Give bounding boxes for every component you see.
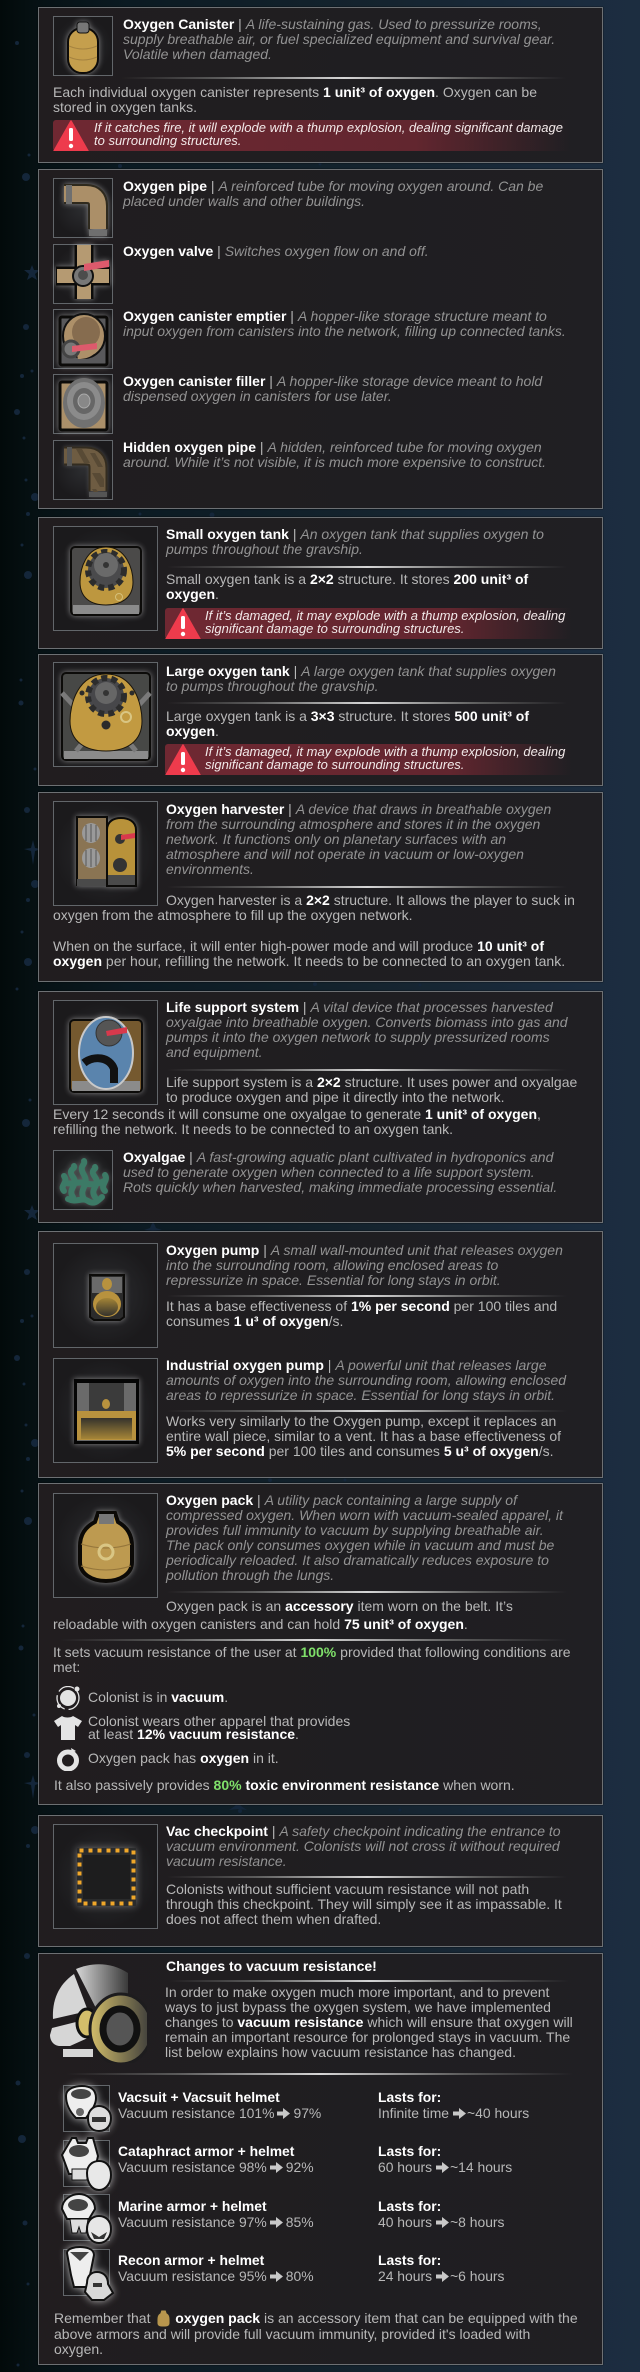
panel: oxygen pumps: [38, 1231, 603, 1478]
icon: oxyalgae: [53, 1150, 113, 1210]
duration: recon: [378, 2253, 578, 2284]
description: vac checkpoint: vacuum resistance.: [166, 1853, 287, 1869]
panel: vac checkpoint: [38, 1815, 603, 1947]
body text: industrial pump stats: Works very similarly to the Oxygen pump, except it replaces an: [166, 1413, 556, 1429]
description: oxyalgae: used to generate oxygen when connected to a life support system.: [123, 1164, 535, 1180]
icon: recon armor and helmet: [63, 2249, 110, 2296]
icon: large oxygen tank: [53, 662, 158, 767]
icon: vac checkpoint: [53, 1824, 158, 1929]
warning: large tank explosion: [165, 744, 572, 775]
description: life support system: pumps it into the oxygen network to supply pressurized rooms: [166, 1029, 550, 1045]
description: hidden oxygen pipe: around. While it’s not visible, it is much more expensive to construct.: [123, 454, 546, 470]
description: oxygen canister: [123, 16, 555, 62]
icon: oxygen harvester: [53, 801, 158, 906]
description: oxygen pump: repressurize in space. Essential for long stays in orbit.: [166, 1272, 501, 1288]
description: large oxygen tank: Large oxygen tank | A large oxygen tank that supplies oxygen: [166, 663, 556, 679]
armor stats: vacsuit: Vacuum resistance 101% 97%: [118, 2105, 321, 2121]
body text: vacuum resistance explanation: ways to just bypass the oxygen system, we have implemented: [165, 1999, 551, 2015]
footer note: oxygen pack reminder: [54, 2310, 584, 2357]
description: oxygen canister filler: dispensed oxygen in canisters for use later.: [123, 388, 392, 404]
body text: life support structure: to produce oxygen and pipe it directly into the network.: [166, 1089, 505, 1105]
duration: marine: [378, 2199, 578, 2230]
description: oxyalgae: [123, 1149, 557, 1195]
icon: oxygen valve: [53, 244, 113, 304]
warning: large tank explosion: significant damage to surrounding structures.: [205, 757, 464, 772]
icon: hidden oxygen pipe: [53, 440, 113, 500]
body text: small tank stats: oxygen.: [166, 586, 219, 602]
panel: oxygen harvester: [38, 792, 603, 982]
duration: marine: 40 hours ~8 hours: [378, 2214, 505, 2230]
description: oxygen canister filler: Oxygen canister filler | A hopper-like storage device meant to hold: [123, 373, 542, 389]
description: oxyalgae: Oxyalgae | A fast-growing aquatic plant cultivated in hydroponics and: [123, 1149, 553, 1165]
icon: vacsuit and helmet: [63, 2085, 110, 2132]
armor stats: recon: Recon armor + helmet: [118, 2252, 264, 2268]
footer note: oxygen pack reminder: oxygen.: [54, 2341, 103, 2357]
body text: vacuum resistance explanation: list below explains how vacuum resistance has changed.: [165, 2044, 516, 2060]
body text: harvester output: When on the surface, it will enter high-power mode and will produce 10 unit³ of: [53, 938, 544, 954]
body text: harvester output: [53, 938, 565, 969]
description: oxygen pack: Oxygen pack | A utility pack containing a large supply of: [166, 1492, 517, 1508]
description: oxygen canister emptier: input oxygen from canisters into the network, filling up connected tanks.: [123, 323, 566, 339]
description: large oxygen tank: to pumps throughout the gravship.: [166, 678, 378, 694]
icon: oxygen pump: [53, 1243, 158, 1348]
description: oxygen harvester: atmosphere and will not operate in vacuum or low-oxygen: [166, 846, 524, 862]
description: industrial oxygen pump: [166, 1357, 566, 1403]
heading: changes to vacuum resistance: Changes to vacuum resistance!: [166, 1958, 377, 1974]
body text: canister details: stored in oxygen tanks.: [53, 99, 197, 115]
description: oxygen harvester: from the surrounding atmosphere and stores it in the oxygen: [166, 816, 540, 832]
panel: oxygen pack: [38, 1483, 603, 1805]
body text: life support structure: Life support system is a 2×2 structure. It uses power and oxyalgae: [166, 1074, 577, 1090]
armor stats: cataphract: [118, 2143, 314, 2175]
body text: harvester structure: Oxygen harvester is a 2×2 structure. It allows the player to suck in: [166, 892, 575, 908]
body text: harvester output: oxygen per hour, refilling the network. It needs to be connected to an oxygen tank.: [53, 953, 565, 969]
icon: oxygen canister emptier: [53, 309, 113, 369]
body text: industrial pump stats: [166, 1413, 562, 1459]
description: oxygen valve: Oxygen valve | Switches oxygen flow on and off.: [123, 243, 429, 259]
warning: small tank explosion: [165, 608, 572, 639]
description: hidden oxygen pipe: [123, 439, 546, 470]
armor stats: vacsuit: [118, 2089, 321, 2121]
description: life support system: oxyalgae into breathable oxygen. Converts biomass into gas and: [166, 1014, 568, 1030]
body text: pack accessory: [53, 1598, 513, 1632]
duration: cataphract: [378, 2144, 578, 2175]
description: oxygen canister emptier: [123, 308, 566, 339]
body text: checkpoint behaviour: [166, 1881, 562, 1927]
armor stats: cataphract: Cataphract armor + helmet: [118, 2143, 294, 2159]
body text: vacuum resistance conditions: met:: [53, 1659, 80, 1675]
description: small oxygen tank: Small oxygen tank | An oxygen tank that supplies oxygen to: [166, 526, 544, 542]
description: oxygen pack: compressed oxygen. When worn with vacuum-sealed apparel, it: [166, 1507, 563, 1523]
duration: cataphract: 60 hours ~14 hours: [378, 2159, 512, 2175]
description: oxygen pack: [166, 1492, 564, 1583]
body text: harvester structure: [53, 892, 575, 923]
description: oxygen canister: supply breathable air, or fuel specialized equipment and survival gear.: [123, 31, 555, 47]
duration: vacsuit: [378, 2089, 529, 2121]
body text: small tank stats: [166, 571, 528, 602]
icon: oxygen pipe: [53, 178, 113, 238]
panel: small oxygen tank: [38, 517, 603, 649]
duration: recon: 24 hours ~6 hours: [378, 2268, 505, 2284]
description: oxygen canister: Volatile when damaged.: [123, 46, 272, 62]
icon: small oxygen tank: [53, 526, 158, 631]
condition: apparel: Colonist wears other apparel that provides: [88, 1713, 350, 1729]
description: oxygen harvester: Oxygen harvester | A device that draws in breathable oxygen: [166, 801, 551, 817]
body text: large tank stats: oxygen.: [166, 723, 219, 739]
description: life support system: and equipment.: [166, 1044, 263, 1060]
duration: vacsuit: Infinite time ~40 hours: [378, 2105, 529, 2121]
body text: vacuum resistance conditions: [53, 1644, 571, 1675]
armor stats: marine: Vacuum resistance 97% 85%: [118, 2214, 314, 2230]
description: industrial oxygen pump: amounts of oxygen into the surrounding room, allowing enclosed: [166, 1372, 566, 1388]
body text: checkpoint behaviour: Colonists without sufficient vacuum resistance will not path: [166, 1881, 529, 1897]
body text: checkpoint behaviour: through this checkpoint. They will simply see it as impassable. It: [166, 1896, 562, 1912]
description: oxygen harvester: environments.: [166, 861, 254, 877]
condition: apparel: [88, 1713, 350, 1742]
body text: oxygen pump stats: It has a base effectiveness of 1% per second per 100 tiles and: [166, 1298, 557, 1314]
description: vac checkpoint: [166, 1823, 561, 1869]
condition: vacuum: Colonist is in vacuum.: [88, 1689, 228, 1705]
body text: checkpoint behaviour: does not affect them when drafted.: [166, 1911, 381, 1927]
footer note: oxygen pack reminder: above armors and will provide full vacuum immunity, provided it's loaded with: [54, 2326, 530, 2342]
body text: pack accessory: Oxygen pack is an accessory item worn on the belt. It’s: [166, 1598, 513, 1614]
condition: oxygen in pack: Oxygen pack has oxygen in it.: [88, 1750, 279, 1766]
description: oxygen pipe: [122, 178, 543, 209]
armor stats: marine: Marine armor + helmet: [118, 2198, 267, 2214]
icon: helmet with oxygen: [50, 1964, 147, 2062]
warning: canister explosion: to surrounding structures.: [94, 133, 241, 148]
armor stats: marine: [118, 2199, 358, 2230]
body text: vacuum resistance explanation: [165, 1984, 573, 2060]
description: oxygen pump: Oxygen pump | A small wall-mounted unit that releases oxygen: [166, 1242, 563, 1258]
warning: small tank explosion: If it’s damaged, it may explode with a thump explosion, dealing: [205, 608, 565, 623]
body text: vacuum resistance explanation: remain an important resource for prolonged stays in vacuum. The: [165, 2029, 570, 2045]
description: oxygen pipe: Oxygen pipe | A reinforced tube for moving oxygen around. Can be: [123, 178, 543, 194]
icon: oxygen canister filler: [53, 374, 113, 434]
duration: marine: Lasts for:: [378, 2198, 441, 2214]
body text: canister details: [53, 84, 537, 115]
icon: oxygen ring: [57, 1748, 79, 1771]
icon: life support system: [53, 1000, 158, 1105]
description: oxygen pack: The pack only consumes oxygen while in vacuum and must be: [166, 1537, 554, 1553]
description: small oxygen tank: pumps throughout the gravship.: [166, 541, 363, 557]
description: life support system: [166, 999, 568, 1060]
description: oxygen canister filler: [123, 373, 542, 404]
body text: industrial pump stats: 5% per second per 100 tiles and consumes 5 u³ of oxygen/s.: [166, 1443, 554, 1459]
description: oxygen pack: periodically reloaded. It also dramatically reduces exposure to: [166, 1552, 549, 1568]
warning: canister explosion: If it catches fire, it will explode with a thump explosion, dealing significant damage: [94, 120, 563, 135]
body text: large tank stats: [166, 708, 530, 739]
warning: large tank explosion: If it’s damaged, it may explode with a thump explosion, dealing: [205, 744, 565, 759]
body text: industrial pump stats: entire wall piece, similar to a vent. It has a base effectiveness of: [166, 1428, 561, 1444]
body text: life support output: refilling the network. It needs to be connected to an oxygen tank.: [53, 1121, 453, 1137]
condition: apparel: at least 12% vacuum resistance.: [88, 1726, 299, 1742]
armor stats: recon: [118, 2253, 358, 2284]
description: oxygen pump: into the surrounding room, allowing enclosed areas to: [166, 1257, 498, 1273]
warning: canister explosion: [53, 120, 571, 151]
body text: harvester structure: oxygen from the atmosphere to fill up the oxygen network.: [53, 907, 413, 923]
icon: cataphract armor and helmet: [63, 2140, 110, 2187]
description: large oxygen tank: [166, 663, 556, 694]
panel: oxygen canister: [38, 7, 603, 163]
body text: life support output: Every 12 seconds it will consume one oxyalgae to generate 1 unit³ of oxygen,: [53, 1106, 541, 1122]
body text: oxygen pump stats: [166, 1298, 557, 1329]
description: oxygen pack: provides full immunity to vacuum by supplying breathable air.: [166, 1522, 544, 1538]
body text: life support output: [53, 1106, 541, 1137]
description: vac checkpoint: vacuum environment. Colonists will not cross it without required: [166, 1838, 560, 1854]
armor stats: recon: Vacuum resistance 95% 80%: [118, 2268, 314, 2284]
icon: marine armor and helmet: [63, 2194, 110, 2241]
armor stats: vacsuit: Vacsuit + Vacsuit helmet: [118, 2089, 280, 2105]
description: oxygen harvester: [166, 801, 551, 877]
armor stats: cataphract: Vacuum resistance 98% 92%: [118, 2159, 314, 2175]
panel: oxygen pipes and canister equipment: [38, 169, 603, 509]
footer note: oxygen pack reminder: Remember that oxygen pack is an accessory item that can be equipped with the: [54, 2310, 578, 2326]
description: hidden oxygen pipe: Hidden oxygen pipe | A hidden, reinforced tube for moving oxygen: [123, 439, 542, 455]
body text: large tank stats: Large oxygen tank is a 3×3 structure. It stores 500 unit³ of: [166, 708, 529, 724]
body text: vacuum resistance conditions: It sets vacuum resistance of the user at 100% provided that following conditions are: [53, 1644, 571, 1660]
icon: apparel shirt: [54, 1716, 82, 1740]
body text: vacuum resistance explanation: changes to vacuum resistance which will ensure that oxygen will: [165, 2014, 573, 2030]
description: oxygen pipe: placed under walls and other buildings.: [123, 193, 365, 209]
body text: life support structure: [166, 1074, 577, 1105]
panel: large oxygen tank: [38, 654, 603, 786]
description: industrial oxygen pump: areas to repressurize in space. Essential for long stays in orbit.: [166, 1387, 555, 1403]
description: oxygen pump: [166, 1242, 563, 1288]
panel: life support system and oxyalgae: [38, 991, 603, 1223]
icon: vacuum planet: [56, 1686, 80, 1710]
description: life support system: Life support system | A vital device that processes harvested: [166, 999, 553, 1015]
description: small oxygen tank: [166, 526, 544, 557]
description: oxyalgae: Rots quickly when harvested, making immediate processing essential.: [123, 1179, 557, 1195]
description: oxygen harvester: network. It functions only on planetary surfaces with an: [166, 831, 506, 847]
description: vac checkpoint: Vac checkpoint | A safety checkpoint indicating the entrance to: [166, 1823, 561, 1839]
panel: changes to vacuum resistance: [38, 1953, 603, 2365]
body text: toxic resistance: It also passively provides 80% toxic environment resistance when worn.: [54, 1777, 515, 1793]
body text: pack accessory: reloadable with oxygen canisters and can hold 75 unit³ of oxygen.: [53, 1616, 468, 1632]
duration: cataphract: Lasts for:: [378, 2143, 441, 2159]
body text: vacuum resistance explanation: In order to make oxygen much more important, and to prevent: [165, 1984, 549, 2000]
icon: oxygen pack: [53, 1493, 158, 1598]
body text: canister details: Each individual oxygen canister represents 1 unit³ of oxygen. Oxygen can be: [53, 84, 537, 100]
icon: oxygen canister: [53, 16, 113, 76]
warning: small tank explosion: significant damage to surrounding structures.: [205, 621, 464, 636]
description: oxygen pack: pollution through the lungs.: [166, 1567, 334, 1583]
description: industrial oxygen pump: Industrial oxygen pump | A powerful unit that releases large: [166, 1357, 546, 1373]
body text: small tank stats: Small oxygen tank is a 2×2 structure. It stores 200 unit³ of: [166, 571, 528, 587]
icon: industrial oxygen pump: [53, 1358, 158, 1463]
duration: vacsuit: Lasts for:: [378, 2089, 441, 2105]
description: oxygen canister emptier: Oxygen canister emptier | A hopper-like storage structure meant to: [123, 308, 547, 324]
body text: oxygen pump stats: consumes 1 u³ of oxygen/s.: [166, 1313, 343, 1329]
duration: recon: Lasts for:: [378, 2252, 441, 2268]
description: oxygen canister: Oxygen Canister | A life-sustaining gas. Used to pressurize rooms,: [123, 16, 542, 32]
